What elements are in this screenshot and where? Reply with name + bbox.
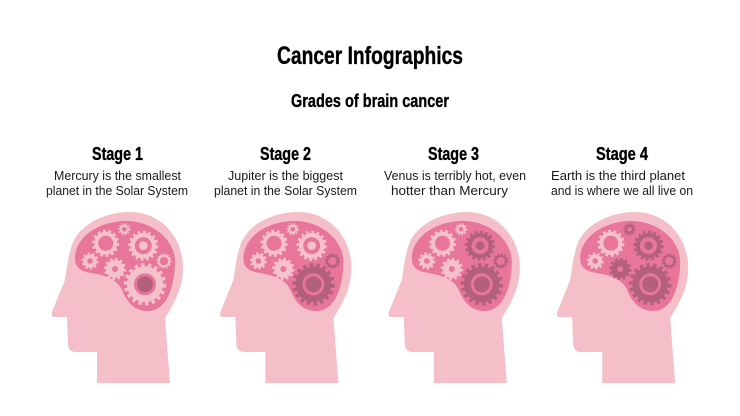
stage 1 description: Mercury is the smallest bbox=[54, 169, 182, 183]
panel: stage 4 bbox=[551, 144, 693, 383]
panel: stage 1 bbox=[46, 144, 188, 383]
stage 1 description: planet in the Solar System bbox=[46, 184, 188, 198]
stage 2 description: Jupiter is the biggest bbox=[228, 169, 344, 183]
stage 3 description: Venus is terribly hot, even bbox=[384, 169, 526, 183]
icon: head with brain gears, stage 3 bbox=[389, 212, 520, 383]
panel: stage 3 bbox=[384, 144, 526, 383]
stage 3 description: hotter than Mercury bbox=[391, 184, 509, 198]
icon: head with brain gears, stage 4 bbox=[557, 212, 688, 383]
stage 4 description: Earth is the third planet bbox=[551, 169, 686, 183]
panel: stage 2 bbox=[214, 144, 357, 383]
title: Cancer Infographics bbox=[277, 42, 463, 70]
stage 1 heading: Stage 1 bbox=[92, 144, 143, 164]
stage 4 description: and is where we all live on bbox=[551, 184, 693, 198]
subtitle: Grades of brain cancer bbox=[291, 91, 449, 111]
stage 4 heading: Stage 4 bbox=[596, 144, 648, 164]
stage 2 heading: Stage 2 bbox=[260, 144, 311, 164]
stage 2 description: planet in the Solar System bbox=[214, 184, 357, 198]
icon: head with brain gears, stage 1 bbox=[52, 212, 183, 383]
icon: head with brain gears, stage 2 bbox=[220, 212, 351, 383]
stage 3 heading: Stage 3 bbox=[428, 144, 479, 164]
